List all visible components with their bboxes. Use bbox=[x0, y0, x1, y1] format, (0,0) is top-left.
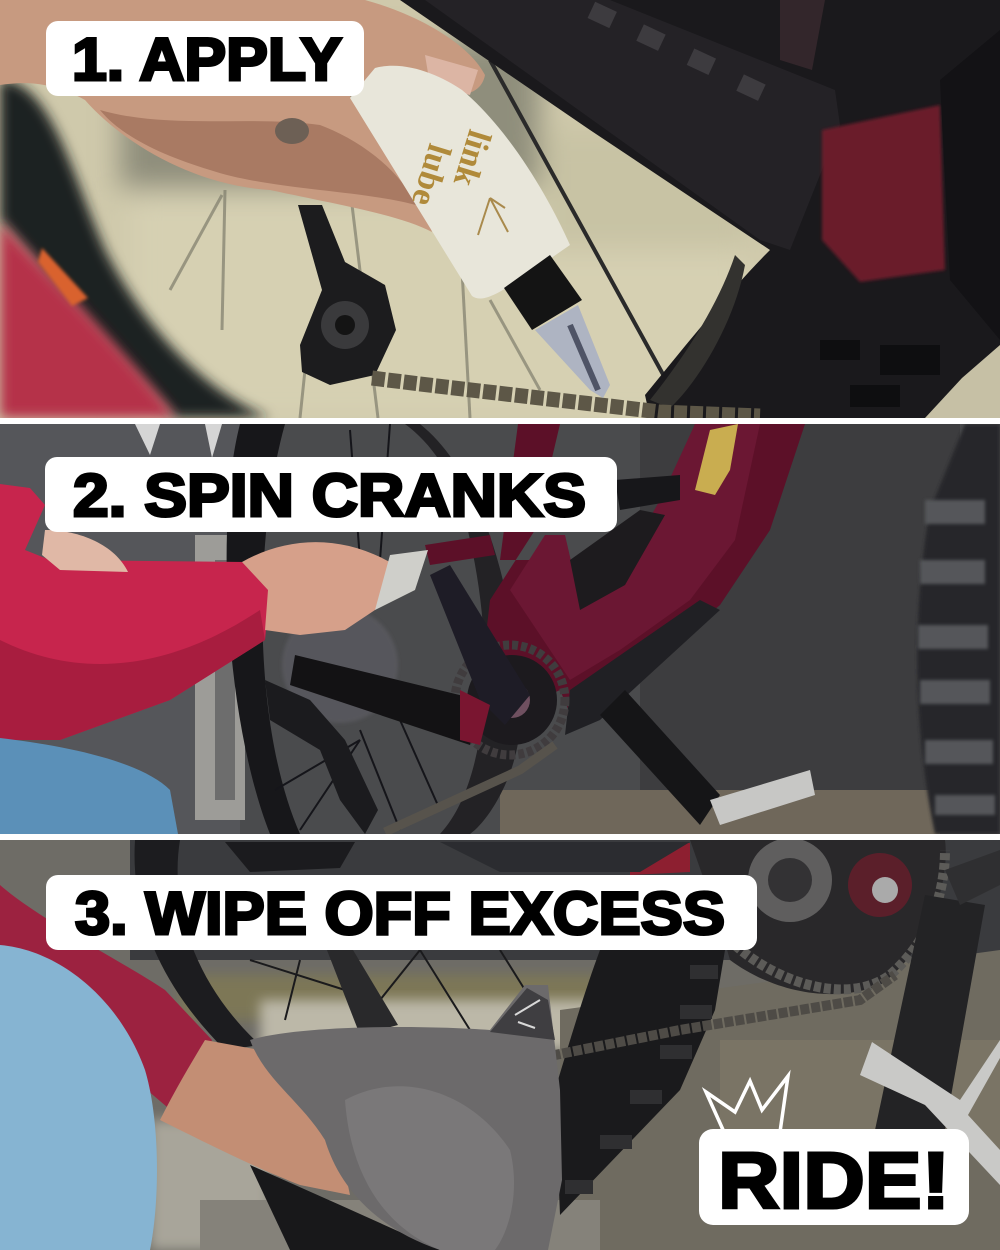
icon: crown bbox=[706, 1076, 788, 1132]
bike frame bbox=[487, 424, 805, 708]
jeans and sleeve bbox=[0, 885, 212, 1118]
kickstand and brush bbox=[600, 690, 720, 825]
crank and pedal bbox=[875, 895, 985, 1130]
label: ride: RIDE! bbox=[718, 1136, 950, 1225]
lube bottle: lube bbox=[404, 140, 458, 210]
rear wheel bbox=[135, 840, 260, 1050]
panel: step 2 spin cranks photo bbox=[0, 424, 1000, 834]
right tyre bbox=[917, 424, 1000, 834]
small brush in hand bbox=[375, 550, 428, 610]
label: 2. spin cranks: 2. SPIN CRANKS bbox=[73, 462, 586, 529]
label: 1. apply: 1. APPLY bbox=[72, 26, 342, 93]
hands bbox=[242, 542, 400, 635]
cassette bbox=[282, 607, 398, 723]
derailleur bbox=[298, 205, 396, 385]
rear derailleur bbox=[265, 680, 378, 834]
hand bbox=[160, 1040, 350, 1195]
rear wheel bbox=[227, 424, 300, 834]
panel: step 1 apply photo bbox=[0, 0, 1000, 420]
chain bbox=[385, 745, 555, 832]
chain bbox=[530, 975, 895, 1060]
blurred rear tyre left bbox=[0, 80, 270, 418]
panel: step 3 wipe off excess photo bbox=[0, 838, 1000, 1250]
spokes bbox=[170, 190, 540, 418]
lube bottle: link bbox=[446, 126, 498, 191]
rear tyre bbox=[555, 950, 725, 1215]
frame and rear tyre bbox=[400, 0, 1000, 418]
label: 3. wipe off excess: 3. WIPE OFF EXCESS bbox=[75, 880, 725, 947]
microfibre towel bbox=[250, 985, 562, 1250]
chainring and hub bbox=[440, 838, 946, 994]
sleeve and jeans bbox=[0, 484, 270, 740]
chain bbox=[372, 378, 760, 416]
crank arm and chainring bbox=[290, 565, 565, 755]
lube bottle bbox=[350, 66, 610, 398]
hand holding bottle bbox=[0, 0, 485, 232]
